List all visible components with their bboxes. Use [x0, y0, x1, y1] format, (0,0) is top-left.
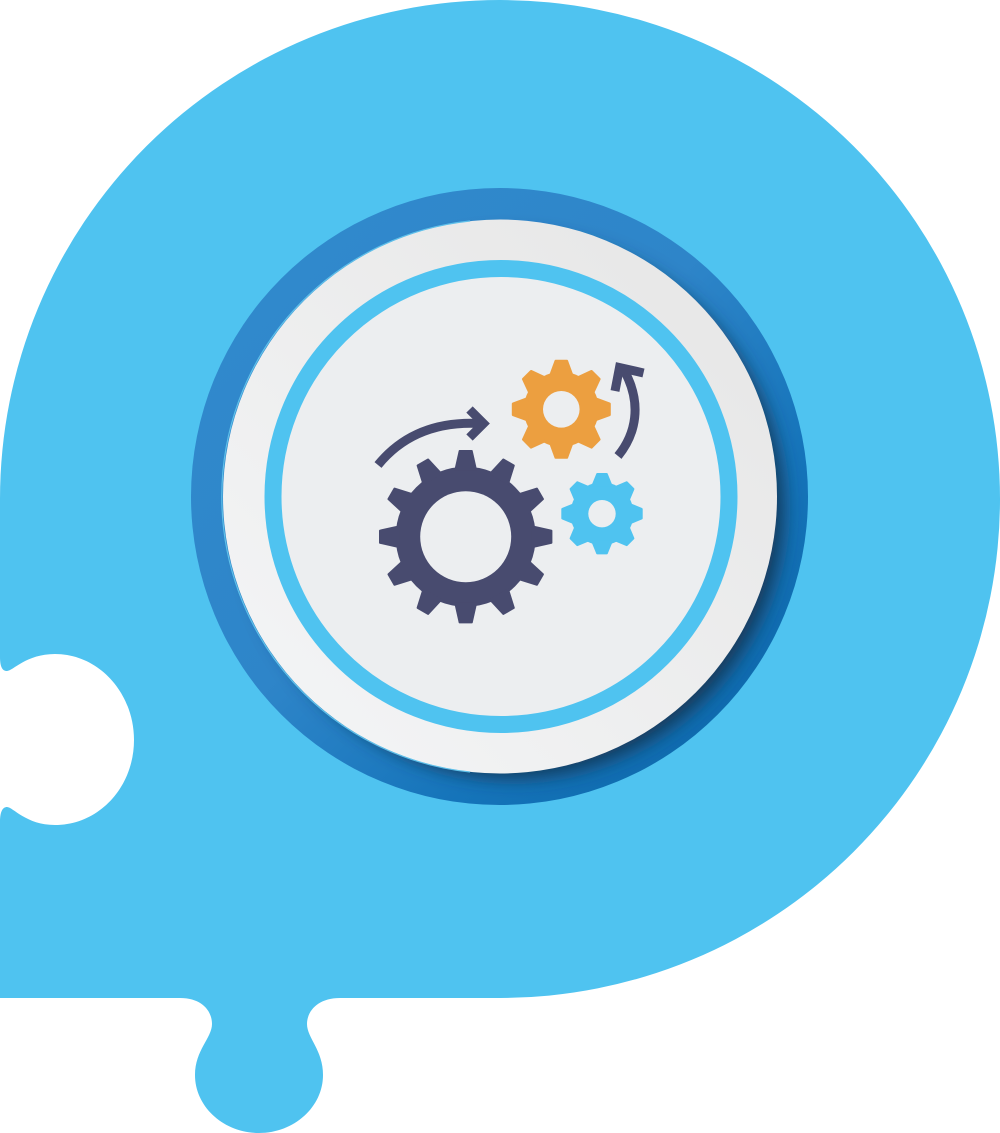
white disc: [223, 220, 777, 774]
icon: curved arrow beside orange gear: [615, 368, 644, 456]
icon: large navy gear: [379, 450, 552, 623]
icon: curved arrow over large gear: [378, 410, 484, 465]
thin light-blue rim on disc left edge: [222, 221, 470, 772]
icon: small blue gear: [561, 473, 643, 554]
icon: orange gear: [512, 360, 611, 459]
dark blue ring with drop shadow: [191, 188, 808, 805]
light blue ring: [273, 268, 729, 724]
